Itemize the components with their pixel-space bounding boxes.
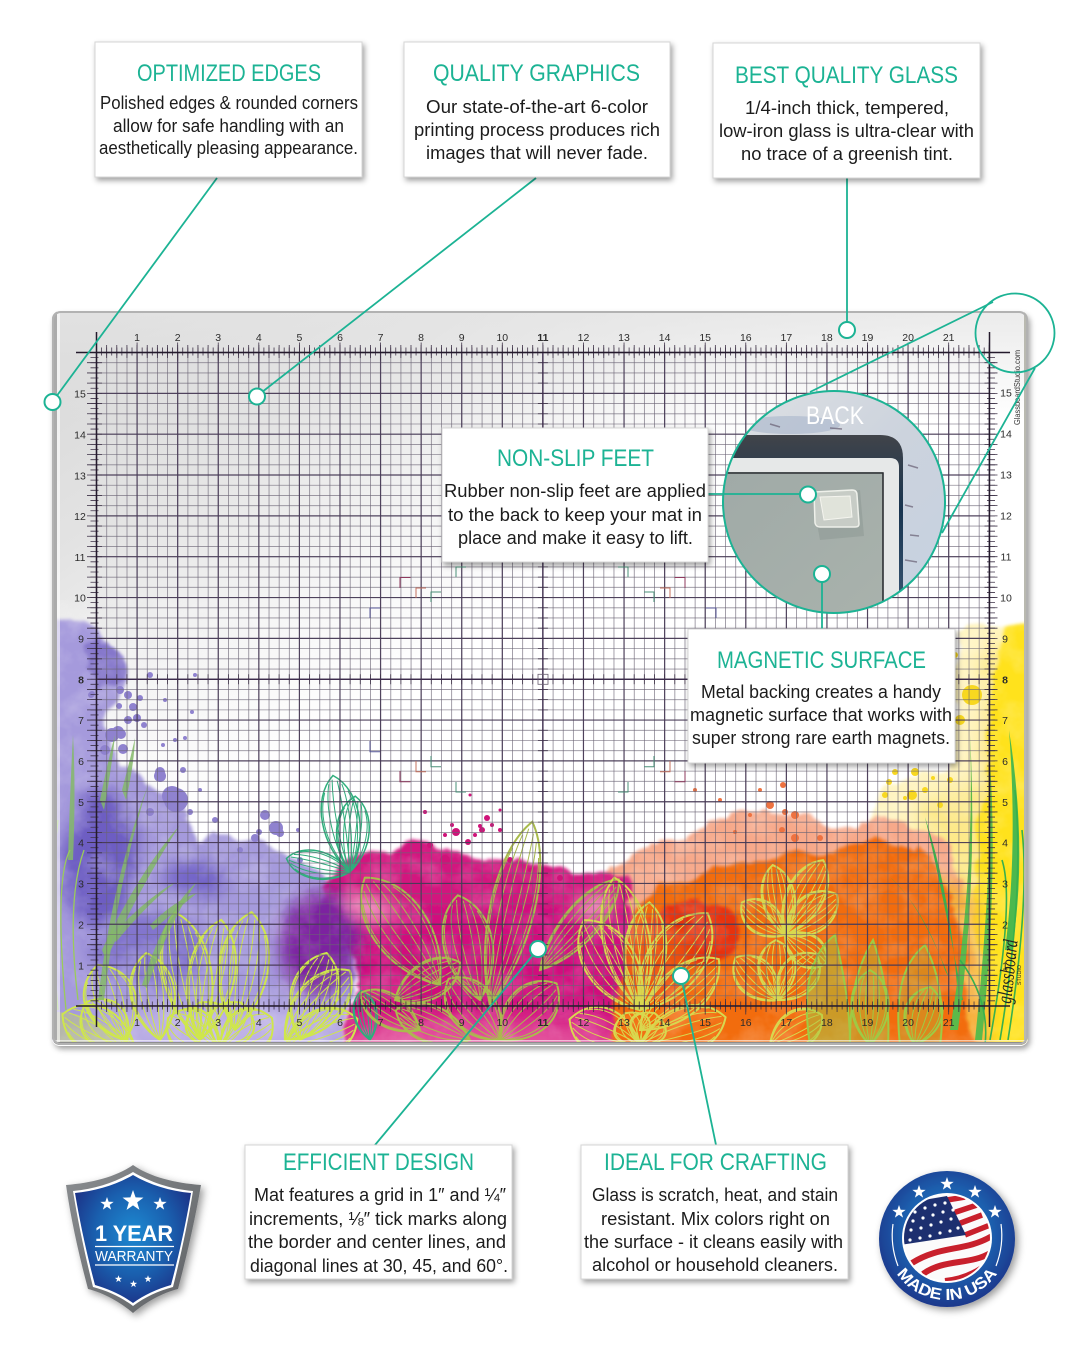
panel: optimized edges: allow for safe handling with an (113, 115, 344, 136)
ruler numbers bottom: 11 (537, 1017, 549, 1029)
registration marks (370, 567, 716, 792)
badge: made in USA seal (877, 1169, 1023, 1315)
panel: quality graphics: QUALITY GRAPHICS (433, 60, 640, 87)
panel: best quality glass (713, 43, 980, 178)
panel: magnetic surface: super strong rare earth magnets. (692, 727, 950, 748)
ruler numbers right: 13 (1000, 470, 1012, 482)
ruler numbers top: 15 (699, 332, 711, 344)
ruler numbers top: 14 (659, 332, 671, 344)
panel: ideal for crafting (581, 1145, 848, 1279)
ruler numbers left (74, 388, 86, 972)
ruler numbers right: 6 (1002, 756, 1008, 768)
ruler numbers bottom: 9 (459, 1017, 465, 1029)
panel: efficient design: Mat features a grid in 1″ and ¼″ (254, 1184, 506, 1205)
ruler numbers right: 10 (1000, 592, 1012, 604)
ruler numbers right: 7 (1002, 715, 1008, 727)
ruler numbers top: 4 (256, 332, 262, 344)
panel: quality graphics: Our state-of-the-art 6-color (426, 96, 648, 117)
ruler numbers right: 8 (1002, 674, 1008, 686)
panel: best quality glass: BEST QUALITY GLASS (735, 62, 958, 89)
ruler numbers left: 11 (75, 552, 86, 564)
ruler numbers left: 10 (74, 592, 86, 604)
ruler numbers bottom: 10 (496, 1017, 508, 1029)
badge: 1 year warranty shield (66, 1165, 201, 1313)
ruler numbers right: 1 (1002, 960, 1008, 972)
panel: ideal for crafting: alcohol or household cleaners. (592, 1254, 838, 1275)
ruler numbers left: 2 (78, 920, 84, 932)
ruler numbers right: 3 (1002, 878, 1008, 890)
connector lines (53, 178, 847, 1145)
ruler numbers right: 5 (1002, 797, 1008, 809)
ruler numbers left: 7 (78, 715, 84, 727)
ruler numbers bottom: 8 (418, 1017, 424, 1029)
panel: efficient design (245, 1145, 512, 1279)
panel: ideal for crafting: the surface - it cleans easily with (584, 1231, 843, 1252)
panel: best quality glass: low-iron glass is ultra-clear with (719, 120, 974, 141)
panel: efficient design: increments, ⅛″ tick marks along (249, 1208, 507, 1229)
ruler numbers bottom: 4 (256, 1017, 262, 1029)
panel: quality graphics (404, 42, 670, 177)
panel: ideal for crafting: resistant. Mix colors right on (601, 1208, 830, 1229)
ruler numbers top: 16 (740, 332, 752, 344)
panel: non-slip feet (442, 428, 708, 562)
ruler numbers top: 5 (296, 332, 302, 344)
ruler numbers right: 2 (1002, 920, 1008, 932)
ruler numbers right: 4 (1002, 838, 1008, 850)
ruler numbers right: 11 (1001, 552, 1012, 564)
magnified photo of board back (720, 388, 950, 622)
panel: quality graphics: images that will never fade. (426, 142, 648, 163)
ruler numbers top: 18 (821, 332, 833, 344)
ruler numbers bottom: 1 (134, 1017, 140, 1029)
badge: 1 year warranty shield: 1 YEAR (95, 1221, 173, 1246)
watercolor paint background (40, 618, 1040, 1060)
ruler numbers right: 9 (1002, 634, 1008, 646)
ruler numbers top: 9 (459, 332, 465, 344)
badge: made in USA seal: MADE IN USA (897, 1268, 998, 1300)
ruler numbers bottom: 14 (659, 1017, 671, 1029)
panel: magnetic surface: MAGNETIC SURFACE (717, 647, 926, 674)
ruler numbers left: 1 (78, 960, 84, 972)
ruler numbers top: 13 (618, 332, 630, 344)
ruler numbers top: 8 (418, 332, 424, 344)
glassboard signature logo (997, 938, 1021, 1004)
ruler numbers top: 11 (537, 332, 549, 344)
ruler numbers top: 1 (134, 332, 140, 344)
ruler numbers left: 14 (74, 430, 86, 442)
line-art flowers (53, 772, 949, 1070)
ruler numbers top: 10 (496, 332, 508, 344)
ruler numbers right: 12 (1000, 510, 1012, 522)
ruler numbers left: 6 (78, 756, 84, 768)
ruler numbers bottom: 12 (578, 1017, 589, 1029)
badge: 1 year warranty shield: WARRANTY (95, 1249, 173, 1265)
ruler numbers left: 15 (74, 388, 86, 400)
ruler numbers left: 8 (78, 674, 84, 686)
ruler numbers top: 12 (578, 332, 589, 344)
panel: optimized edges: aesthetically pleasing appearance. (99, 137, 358, 158)
ruler numbers bottom: 19 (862, 1017, 873, 1029)
ruler numbers right: 15 (1000, 388, 1012, 400)
ruler numbers bottom: 2 (175, 1017, 181, 1029)
magnified photo of board back: BACK (806, 402, 864, 430)
panel: best quality glass: no trace of a greenish tint. (741, 143, 953, 164)
ruler numbers top: 7 (378, 332, 384, 344)
watercolor mottling (52, 600, 1028, 1045)
ruler numbers bottom: 15 (699, 1017, 711, 1029)
panel: ideal for crafting: IDEAL FOR CRAFTING (604, 1149, 827, 1176)
ruler numbers top: 17 (781, 332, 792, 344)
ruler numbers top: 20 (902, 332, 914, 344)
ruler numbers top: 6 (337, 332, 343, 344)
marker dots (44, 322, 855, 984)
panel: optimized edges: Polished edges & rounded corners (100, 92, 358, 113)
icon: US flag (904, 1196, 990, 1281)
panel: ideal for crafting: Glass is scratch, heat, and stain (592, 1184, 838, 1205)
magnifier ring on corner (976, 294, 1054, 372)
ruler numbers left: 4 (78, 838, 84, 850)
ruler numbers left: 9 (78, 634, 84, 646)
ruler numbers bottom: 13 (618, 1017, 630, 1029)
ruler numbers bottom: 18 (821, 1017, 833, 1029)
panel: efficient design: EFFICIENT DESIGN (283, 1149, 474, 1176)
ruler numbers bottom: 16 (740, 1017, 752, 1029)
panel: non-slip feet: Rubber non-slip feet are applied (444, 480, 706, 501)
ruler numbers top: 2 (175, 332, 181, 344)
panel: optimized edges (95, 42, 362, 177)
panel: non-slip feet: NON-SLIP FEET (497, 445, 654, 472)
ruler numbers top: 19 (862, 332, 873, 344)
ruler numbers bottom: 20 (902, 1017, 914, 1029)
ruler numbers bottom: 7 (378, 1017, 384, 1029)
ruler numbers left: 13 (74, 470, 86, 482)
ruler numbers bottom: 5 (296, 1017, 302, 1029)
ruler numbers left: 3 (78, 878, 84, 890)
panel: best quality glass: 1/4-inch thick, tempered, (745, 97, 949, 118)
panel: efficient design: diagonal lines at 30, 45, and 60°. (250, 1255, 508, 1276)
panel: efficient design: the border and center lines, and (248, 1231, 506, 1252)
panel: magnetic surface: Metal backing creates a handy (701, 681, 942, 702)
glassboard signature logo: glassboard (992, 938, 1023, 1005)
ruler numbers top: 3 (215, 332, 221, 344)
ruler numbers top (134, 334, 954, 341)
ruler numbers bottom: 6 (337, 1017, 343, 1029)
ruler numbers left: 5 (78, 797, 84, 809)
ruler numbers bottom: 17 (781, 1017, 792, 1029)
ruler numbers bottom: 21 (943, 1017, 955, 1029)
connector: magnifier lines (810, 302, 1035, 533)
grass blades (53, 730, 1024, 1045)
glassboard signature logo: STUDIO (1017, 965, 1023, 985)
icon: rubber foot (814, 490, 859, 527)
panel: magnetic surface (688, 629, 955, 763)
ruler numbers left: 12 (74, 511, 86, 523)
ruler grid (76, 332, 1010, 1027)
ruler numbers bottom (134, 1019, 954, 1026)
ruler numbers right: 14 (1000, 428, 1012, 440)
panel: quality graphics: printing process produces rich (414, 119, 660, 140)
glass cutting mat board (40, 311, 1040, 1070)
ruler numbers top: 21 (943, 332, 955, 344)
panel: magnetic surface: magnetic surface that works with (690, 704, 952, 725)
panel: optimized edges: OPTIMIZED EDGES (137, 60, 321, 87)
website text: GlassboardStudio.com (1013, 350, 1022, 425)
panel: non-slip feet: to the back to keep your mat in (448, 504, 702, 525)
paint splatter (88, 652, 982, 881)
ruler numbers bottom: 3 (215, 1017, 221, 1029)
panel: non-slip feet: place and make it easy to lift. (458, 527, 693, 548)
ruler numbers right (1000, 388, 1012, 972)
